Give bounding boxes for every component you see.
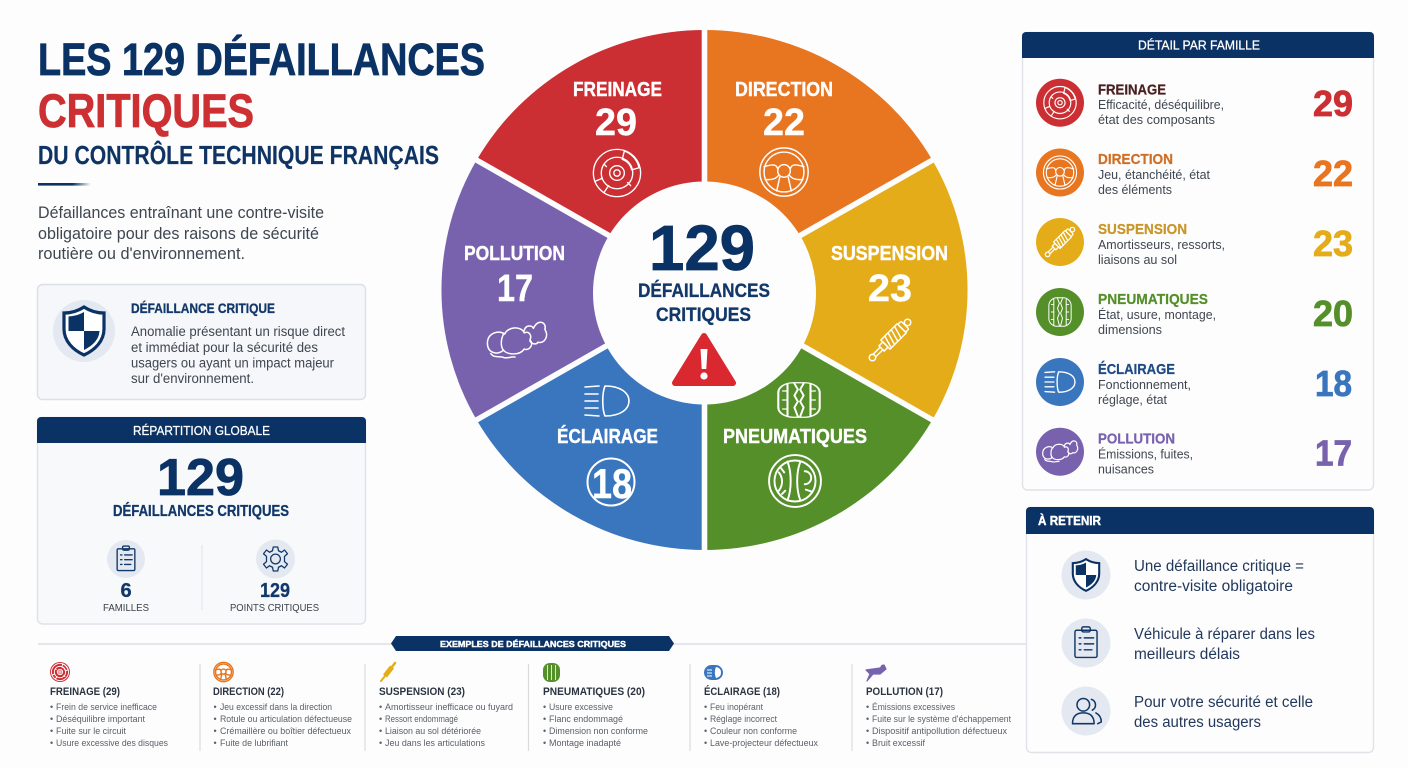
takeaway: réparer: Véhicule à réparer dans les: [1134, 626, 1315, 643]
example column: direction: Crémaillère ou boîtier défectueux: [220, 726, 351, 736]
label: éclairage: [557, 386, 658, 507]
stat: familles: 6: [120, 580, 132, 602]
takeaway: contre-visite: contre-visite obligatoire: [1134, 578, 1293, 595]
example column: suspension: Amortisseur inefficace ou fuyard: [385, 702, 513, 712]
example column: éclairage: Réglage incorrect: [710, 714, 777, 724]
row: suspension: [1036, 218, 1353, 267]
example column: pollution: Fuite sur le système d'échappement: [872, 714, 1011, 724]
slice: direction: [704, 30, 932, 290]
row: direction: des éléments: [1098, 182, 1172, 197]
icon: exhaust smoke: [866, 665, 886, 681]
label: pneumatiques: PNEUMATIQUES: [723, 426, 867, 448]
stat: familles: FAMILLES: [103, 602, 149, 614]
example column: pollution: •: [866, 738, 869, 748]
example column: suspension: •: [379, 738, 382, 748]
row: pollution: 17: [1315, 432, 1352, 474]
row: éclairage: Fonctionnement,: [1098, 377, 1191, 392]
row: éclairage: [1036, 358, 1352, 407]
row: pollution: [1036, 428, 1352, 476]
example column: pollution: Émissions excessives: [872, 702, 955, 712]
title line 2: CRITIQUES: [38, 84, 254, 137]
slice: éclairage: [477, 290, 704, 550]
row: direction: Jeu, étanchéité, état: [1098, 167, 1210, 182]
example column: freinage: •: [50, 714, 53, 724]
center total: CRITIQUES: [656, 304, 751, 326]
row: suspension: 23: [1313, 223, 1353, 264]
label: pollution: POLLUTION: [464, 243, 565, 265]
definition text: Anomalie présentant un risque direct: [131, 324, 345, 339]
icon: brake: [50, 662, 70, 682]
icon: gear: [256, 540, 295, 578]
example column: pneumatiques: •: [543, 738, 546, 748]
slice: freinage: [477, 30, 704, 290]
example column: éclairage: [704, 665, 818, 748]
panel: détail par famille: [1022, 32, 1374, 490]
row: direction: [1036, 148, 1353, 197]
example column: suspension: SUSPENSION (23): [379, 686, 465, 698]
icon: shock absorber: [381, 663, 395, 681]
slice: pneumatiques: [704, 290, 932, 550]
example column: éclairage: Lave-projecteur défectueux: [710, 738, 818, 748]
example column: pneumatiques: •: [543, 726, 546, 736]
row: suspension: liaisons au sol: [1098, 252, 1177, 267]
icon: tyre: [543, 663, 560, 682]
example column: pollution: •: [866, 726, 869, 736]
row: pneumatiques: dimensions: [1098, 322, 1162, 337]
example column: suspension: Ressort endommagé: [385, 714, 458, 724]
center total: [638, 212, 770, 383]
slice: suspension: [704, 160, 968, 420]
label: pneumatiques: [723, 383, 867, 507]
pie chart: six families: [441, 25, 968, 555]
intro paragraph: obligatoire pour des raisons de sécurité: [38, 225, 319, 243]
example column: pneumatiques: Usure excessive: [549, 702, 613, 712]
example column: direction: Rotule ou articulation défectueuse: [220, 714, 352, 724]
panel heading: À RETENIR: [1038, 513, 1102, 528]
label: freinage: [573, 79, 662, 197]
example column: éclairage: Couleur non conforme: [710, 726, 797, 736]
example column: pneumatiques: •: [543, 714, 546, 724]
example column: pneumatiques: •: [543, 702, 546, 712]
panel: définition défaillance critique: [38, 284, 366, 400]
intro paragraph: [38, 204, 324, 263]
title block: [38, 34, 485, 170]
icon: warning triangle: [675, 336, 733, 383]
row: suspension: Amortisseurs, ressorts,: [1098, 237, 1225, 252]
label: éclairage: ÉCLAIRAGE: [557, 425, 658, 448]
example column: direction: DIRECTION (22): [213, 686, 284, 698]
example column: freinage: •: [50, 726, 53, 736]
label: suspension: SUSPENSION: [831, 243, 948, 265]
row: direction: 22: [1313, 153, 1353, 194]
row: freinage: FREINAGE: [1098, 81, 1166, 98]
example column: freinage: FREINAGE (29): [50, 686, 120, 698]
example column: éclairage: Feu inopérant: [710, 702, 763, 712]
intro paragraph: Défaillances entraînant une contre-visite: [38, 204, 324, 222]
row: suspension: SUSPENSION: [1098, 221, 1187, 238]
example column: pneumatiques: Flanc endommagé: [549, 714, 623, 724]
example column: pollution: Bruit excessif: [872, 738, 925, 748]
row: éclairage: ÉCLAIRAGE: [1098, 361, 1175, 378]
example column: direction: •: [214, 714, 217, 724]
label: direction: 22: [763, 102, 805, 144]
label: direction: DIRECTION: [735, 79, 833, 101]
label: direction: [735, 79, 833, 196]
example column: freinage: •: [50, 702, 53, 712]
example column: pneumatiques: Dimension non conforme: [549, 726, 648, 736]
label: freinage: 29: [595, 102, 637, 144]
example column: direction: •: [214, 726, 217, 736]
example column: suspension: [379, 663, 513, 748]
example column: pollution: •: [866, 714, 869, 724]
takeaway: réparer: [1062, 618, 1315, 668]
row: éclairage: 18: [1315, 363, 1352, 404]
slice: pollution: [441, 160, 704, 420]
title line 1: LES 129 DÉFAILLANCES: [38, 34, 485, 85]
subtitle: DU CONTRÔLE TECHNIQUE FRANÇAIS: [38, 140, 439, 170]
example column: freinage: Déséquilibre important: [56, 714, 145, 724]
center total: 129: [649, 212, 755, 284]
panel: répartition globale: [37, 417, 366, 624]
total number: 129: [157, 449, 244, 507]
example column: freinage: Frein de service inefficace: [56, 702, 157, 712]
row: freinage: état des composants: [1098, 112, 1215, 127]
example column: suspension: Liaison au sol détériorée: [385, 726, 481, 736]
takeaway: sécurité: Pour votre sécurité et celle: [1134, 694, 1313, 711]
panel heading: DÉTAIL PAR FAMILLE: [1138, 38, 1260, 52]
label: éclairage: 18: [592, 460, 632, 507]
icon: clipboard: [107, 540, 145, 578]
example column: suspension: •: [379, 714, 382, 724]
example column: direction: Jeu excessif dans la direction: [220, 702, 332, 712]
example column: pollution: •: [866, 702, 869, 712]
example column: pollution: POLLUTION (17): [866, 686, 943, 698]
example column: éclairage: ÉCLAIRAGE (18): [704, 685, 780, 698]
stat: points critiques: POINTS CRITIQUES: [230, 602, 319, 614]
example column: suspension: •: [379, 702, 382, 712]
example column: suspension: •: [379, 726, 382, 736]
panel heading: RÉPARTITION GLOBALE: [133, 423, 270, 438]
label: pollution: [464, 243, 565, 358]
panel: à retenir: [1026, 507, 1374, 752]
row: pneumatiques: 20: [1313, 293, 1353, 334]
stat: points critiques: 129: [260, 580, 290, 602]
example column: pneumatiques: PNEUMATIQUES (20): [543, 686, 645, 698]
center total: DÉFAILLANCES: [638, 279, 770, 302]
row: direction: DIRECTION: [1098, 151, 1173, 168]
icon: wheel: [214, 662, 233, 682]
definition text: [131, 324, 345, 386]
row: freinage: [1036, 79, 1353, 127]
example column: direction: [213, 662, 352, 748]
row: pollution: POLLUTION: [1098, 430, 1175, 448]
takeaway: contre-visite: [1062, 550, 1304, 600]
takeaway: contre-visite: Une défaillance critique =: [1134, 558, 1304, 575]
definition heading: DÉFAILLANCE CRITIQUE: [131, 300, 275, 316]
row: freinage: Efficacité, déséquilibre,: [1098, 97, 1224, 112]
example column: éclairage: •: [704, 726, 707, 736]
row: pollution: Émissions, fuites,: [1098, 446, 1193, 462]
takeaway: sécurité: des autres usagers: [1134, 714, 1261, 731]
row: pneumatiques: État, usure, montage,: [1098, 307, 1216, 322]
example column: direction: Fuite de lubrifiant: [220, 738, 288, 748]
example column: direction: •: [214, 738, 217, 748]
row: pneumatiques: PNEUMATIQUES: [1098, 291, 1208, 308]
row: pollution: nuisances: [1098, 462, 1154, 476]
label: suspension: [831, 243, 948, 364]
example column: éclairage: •: [704, 714, 707, 724]
example column: freinage: [50, 662, 168, 748]
icon: headlamp: [704, 665, 723, 680]
takeaway: sécurité: [1062, 686, 1313, 736]
definition text: usagers ou ayant un impact majeur: [131, 356, 334, 370]
definition text: et immédiat pour la sécurité des: [131, 340, 318, 355]
row: freinage: 29: [1313, 83, 1353, 124]
example column: pneumatiques: [543, 663, 648, 748]
intro paragraph: routière ou d'environnement.: [38, 245, 245, 263]
example column: freinage: Fuite sur le circuit: [56, 726, 126, 736]
icon: shield: [53, 300, 115, 362]
banner: exemples: [391, 636, 674, 651]
stat: familles: [103, 580, 149, 614]
label: pollution: 17: [497, 268, 533, 310]
example column: suspension: Jeu dans les articulations: [385, 738, 485, 748]
total label: DÉFAILLANCES CRITIQUES: [113, 503, 289, 520]
definition text: sur d'environnement.: [131, 371, 254, 386]
label: freinage: FREINAGE: [573, 79, 662, 101]
example column: direction: •: [214, 702, 217, 712]
takeaway: réparer: meilleurs délais: [1134, 646, 1240, 663]
row: éclairage: réglage, état: [1098, 392, 1167, 407]
example column: éclairage: •: [704, 738, 707, 748]
row: pneumatiques: [1036, 288, 1353, 337]
banner: exemples: EXEMPLES DE DÉFAILLANCES CRITIQUES: [440, 639, 626, 649]
example column: freinage: Usure excessive des disques: [56, 738, 168, 748]
example column: freinage: •: [50, 738, 53, 748]
example column: éclairage: •: [704, 702, 707, 712]
label: suspension: 23: [868, 268, 912, 310]
example column: pollution: [866, 665, 1011, 748]
example column: pneumatiques: Montage inadapté: [549, 738, 621, 748]
example column: pollution: Dispositif antipollution défectueux: [872, 726, 1007, 736]
stat: points critiques: [230, 580, 319, 614]
